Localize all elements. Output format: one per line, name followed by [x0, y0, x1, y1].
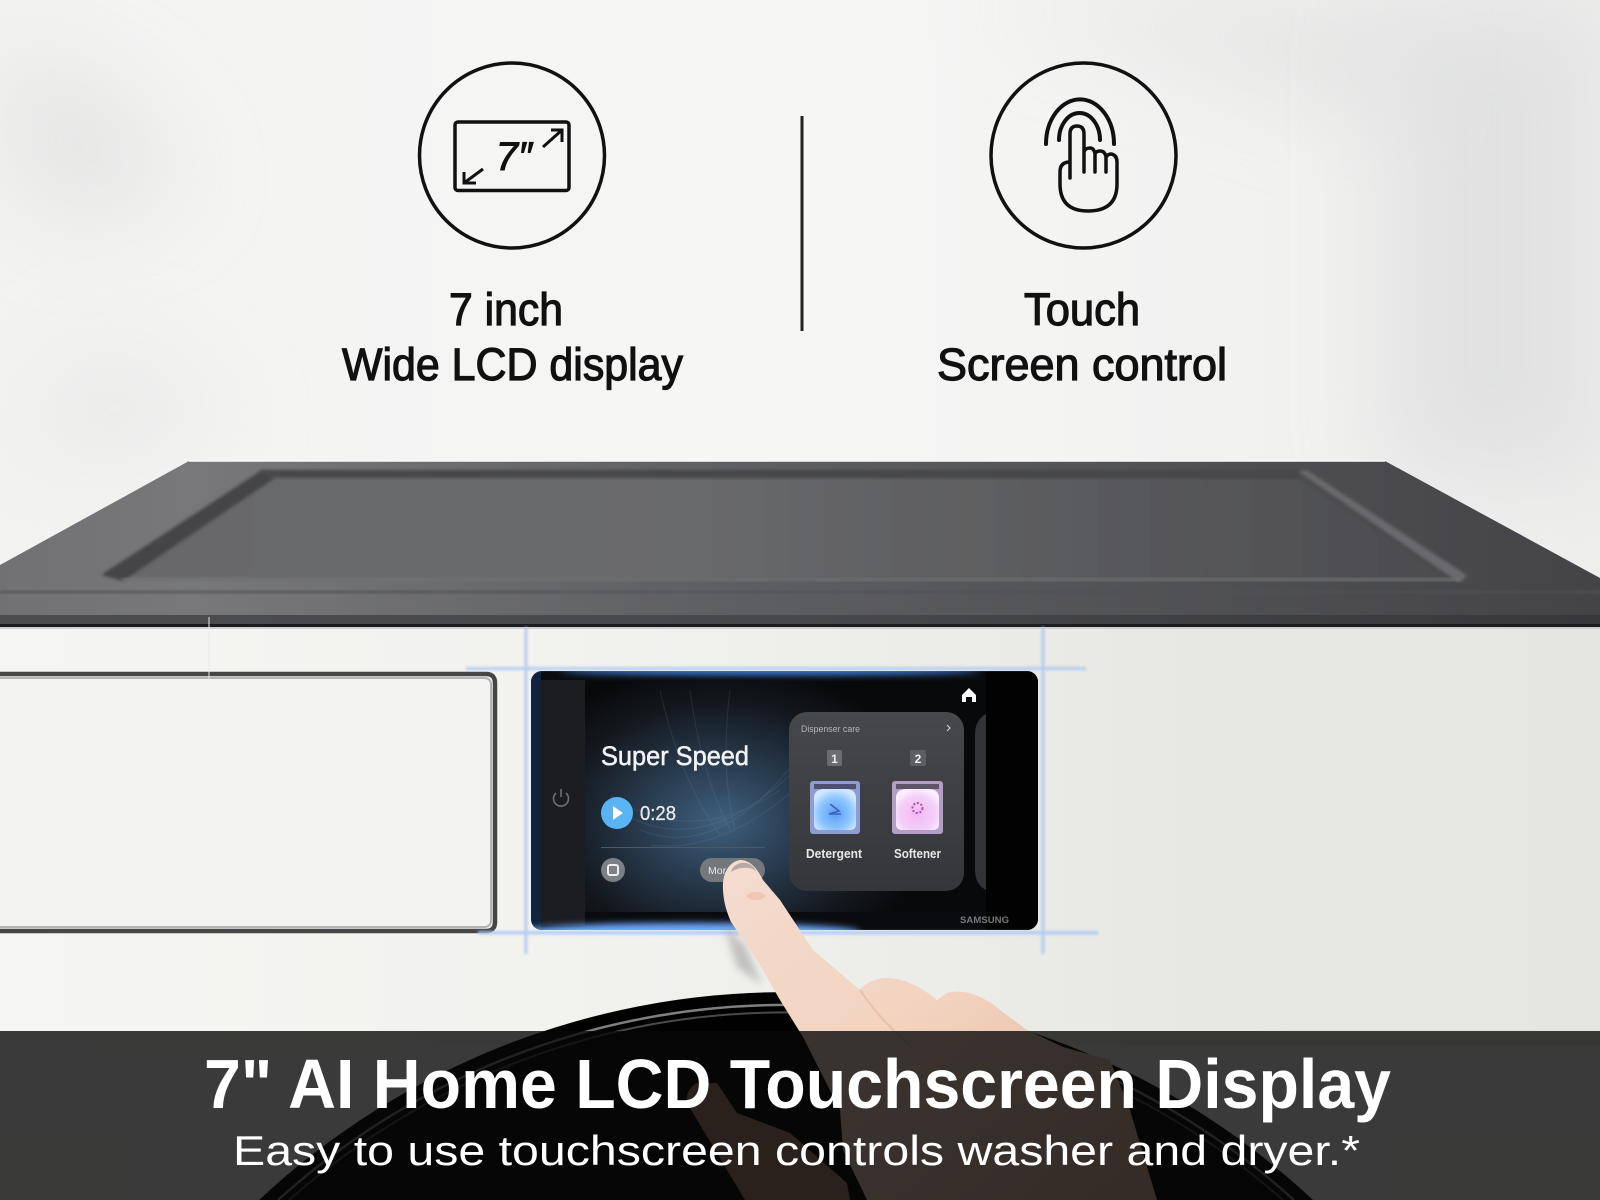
dispenser care card [789, 712, 964, 891]
blue glow [560, 667, 980, 675]
tray front edge [122, 578, 1462, 581]
top recessed tray [122, 478, 1446, 578]
play button [601, 797, 633, 829]
top front strip [0, 615, 1600, 625]
arrow: diagonal up-right [543, 130, 562, 147]
drawer panel [0, 617, 495, 931]
icon: 7 inch display [420, 63, 604, 248]
time: 0:28 [640, 803, 676, 825]
cycle icon [601, 858, 625, 882]
label: touch screen control: Touch [1024, 284, 1140, 335]
background wall [0, 0, 1600, 640]
washer top surface [0, 461, 1600, 629]
blue guide lines [466, 627, 1098, 954]
touch ripples [1046, 99, 1114, 144]
slot 2 number [910, 750, 926, 766]
samsung logo: SAMSUNG [960, 915, 1009, 926]
screen gradient [585, 687, 872, 912]
screen body [531, 671, 1038, 930]
thumb [687, 1083, 850, 1200]
banner title: 7" AI Home LCD Touchscreen Display [204, 1045, 1391, 1123]
next card sliver [975, 714, 986, 890]
finger nail [731, 863, 756, 872]
card heading: Dispenser care [801, 724, 860, 734]
knuckle crease [860, 990, 910, 1045]
hand [687, 860, 1157, 1200]
finger pad [747, 892, 765, 900]
detergent label: Detergent [806, 847, 863, 861]
detergent icon [810, 781, 860, 834]
icon: touch control [991, 63, 1176, 248]
tray right ridge [1298, 471, 1468, 582]
touchscreen display [520, 667, 1038, 941]
label: touch screen control: Screen control [937, 339, 1227, 390]
hand outline [1060, 126, 1117, 211]
washer front panel [0, 625, 1600, 1045]
power icon [554, 789, 568, 806]
tray left groove [101, 470, 275, 581]
slot 1 number: 1 [831, 752, 838, 766]
tray top groove [260, 470, 1300, 478]
softener label: Softener [894, 847, 941, 861]
program name: Super Speed [601, 741, 749, 771]
softener icon [892, 781, 943, 834]
label: 7 inch wide LCD display: 7 inch [449, 284, 563, 335]
home icon [962, 688, 976, 702]
banner subtitle: Easy to use touchscreen controls washer and dryer.* [233, 1127, 1360, 1174]
label: 7 inch wide LCD display [342, 284, 683, 390]
bottom banner [0, 1031, 1600, 1200]
fingers and palm [723, 860, 1157, 1200]
divider [800, 116, 804, 331]
left bezel [541, 680, 585, 925]
slot 2 number: 2 [915, 752, 922, 766]
size label: 7″ [496, 135, 534, 179]
label: 7 inch wide LCD display: Wide LCD display [342, 339, 683, 390]
more button [700, 858, 765, 882]
slot 1 number [827, 750, 842, 766]
chevron [947, 725, 950, 731]
more button: More [708, 865, 732, 877]
washer door [259, 992, 1313, 1200]
finger shadow [724, 925, 762, 985]
label: touch screen control [937, 284, 1227, 390]
arrow: diagonal down-left [464, 169, 483, 183]
